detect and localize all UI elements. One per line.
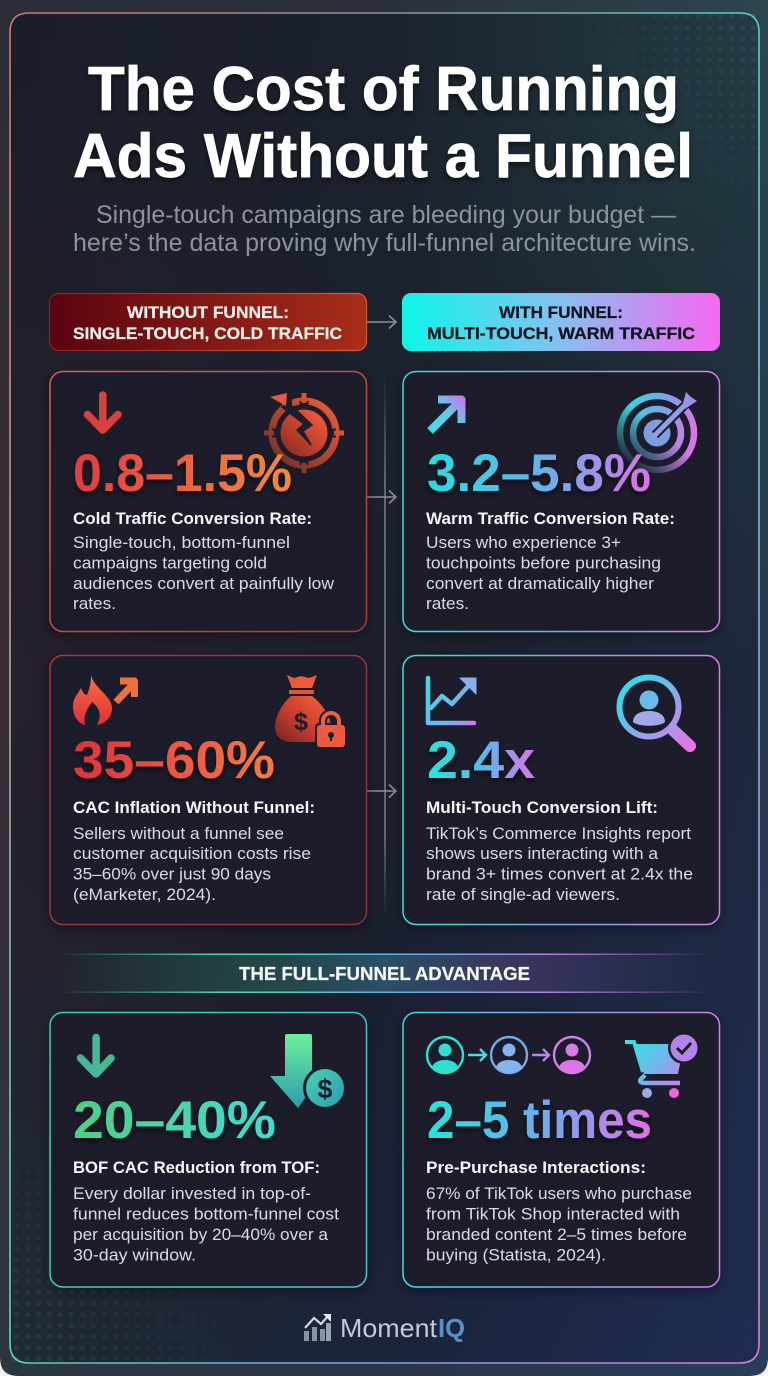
card text: per acquisition by 20–40% over a	[73, 1226, 329, 1244]
card text: (eMarketer, 2024).	[73, 886, 216, 904]
card text: Warm Traffic Conversion Rate:	[426, 510, 675, 528]
icon: big down arrow with dollar coin	[270, 1034, 347, 1110]
logo: momentiq: IQ	[438, 1313, 465, 1343]
subtitle	[73, 201, 696, 257]
connector lines and arrows	[367, 316, 396, 917]
icon: three users with arrows	[427, 1037, 590, 1073]
card text	[73, 510, 334, 613]
icon: money bag with lock	[275, 675, 347, 749]
header: with funnel: MULTI-TOUCH, WARM TRAFFIC	[427, 324, 695, 343]
icon: big down arrow with dollar coin: $	[317, 1074, 333, 1104]
card text	[426, 799, 693, 904]
card text: funnel reduces bottom-funnel cost	[73, 1206, 339, 1224]
panel: multi-touch conversion lift	[403, 656, 720, 924]
card text	[426, 510, 675, 613]
header: without funnel: SINGLE-TOUCH, COLD TRAFFIC	[73, 324, 342, 343]
card text: Cold Traffic Conversion Rate:	[73, 510, 312, 528]
title: The Cost of Running	[88, 55, 679, 124]
stat: 20–40%: 20–40%	[73, 1091, 276, 1150]
card text: 67% of TikTok users who purchase	[426, 1185, 692, 1203]
stat: 0.8–1.5%: 0.8–1.5%	[73, 444, 292, 503]
card text: 35–60% over just 90 days	[73, 866, 271, 884]
panel: bof cac reduction	[50, 1012, 366, 1287]
icon: money bag with lock: $	[294, 708, 308, 736]
card text: branded content 2–5 times before	[426, 1226, 687, 1244]
header: with funnel	[402, 293, 720, 351]
icon: up right arrow	[430, 400, 462, 431]
header: without funnel: WITHOUT FUNNEL:	[127, 303, 289, 322]
icon: line chart	[428, 678, 476, 723]
card text: rate of single-ad viewers.	[426, 886, 620, 904]
card text: brand 3+ times convert at 2.4x the	[426, 866, 693, 884]
card text: shows users interacting with a	[426, 845, 659, 863]
card text: buying (Statista, 2024).	[426, 1246, 606, 1264]
icon: magnifier with user	[620, 678, 690, 746]
panel: cac inflation without funnel	[50, 656, 366, 924]
icon: shopping cart with check	[625, 1032, 700, 1098]
subtitle: Single-touch campaigns are bleeding your budget —	[96, 201, 676, 229]
icon: growth chart logo	[304, 1314, 331, 1341]
card text: from TikTok Shop interacted with	[426, 1206, 680, 1224]
card text: Sellers without a funnel see	[73, 825, 284, 843]
header: with funnel: WITH FUNNEL:	[499, 303, 623, 322]
icon: green down arrow	[80, 1038, 111, 1074]
card text: Every dollar invested in top-of-	[73, 1185, 311, 1203]
card text	[73, 799, 315, 904]
card text: campaigns targeting cold	[73, 554, 267, 572]
icon: red down arrow	[88, 395, 118, 430]
panel: pre-purchase interactions	[403, 1012, 720, 1287]
stat: 3.2–5.8%: 3.2–5.8%	[427, 444, 651, 503]
card text: Pre-Purchase Interactions:	[426, 1159, 646, 1177]
card text: Multi-Touch Conversion Lift:	[426, 799, 658, 817]
panel: cold traffic conversion rate	[50, 372, 366, 632]
card text: 30-day window.	[73, 1246, 196, 1264]
card text	[426, 1159, 692, 1264]
logo: momentiq	[304, 1313, 465, 1343]
icon: bullseye target with dart	[620, 392, 697, 470]
section heading: the full-funnel advantage: THE FULL-FUNNEL ADVANTAGE	[239, 964, 530, 984]
card text	[73, 1159, 339, 1264]
subtitle: here’s the data proving why full-funnel architecture wins.	[73, 229, 696, 257]
card text: convert at dramatically higher	[426, 575, 655, 593]
section heading: the full-funnel advantage	[56, 954, 713, 993]
card text: CAC Inflation Without Funnel:	[73, 799, 315, 817]
icon: flame with arrow	[73, 675, 134, 725]
stat: 2–5 times: 2–5 times	[427, 1091, 652, 1150]
panel: warm traffic conversion rate	[403, 372, 720, 632]
card text: audiences convert at painfully low	[73, 575, 334, 593]
stat: 2.4x: 2.4x	[427, 731, 536, 790]
header: without funnel	[50, 294, 366, 350]
card text: Users who experience 3+	[426, 534, 621, 552]
card text: touchpoints before purchasing	[426, 554, 661, 572]
card text: rates.	[73, 595, 116, 613]
card text: rates.	[426, 595, 469, 613]
card text: Single-touch, bottom-funnel	[73, 534, 290, 552]
title: Ads Without a Funnel	[73, 122, 693, 191]
card text: BOF CAC Reduction from TOF:	[73, 1159, 320, 1177]
icon: broken target	[264, 392, 344, 473]
card text: TikTok’s Commerce Insights report	[426, 825, 691, 843]
title	[73, 55, 693, 191]
logo: momentiq: Moment	[340, 1313, 438, 1343]
stat: 35–60%: 35–60%	[73, 731, 275, 790]
card text: customer acquisition costs rise	[73, 845, 311, 863]
